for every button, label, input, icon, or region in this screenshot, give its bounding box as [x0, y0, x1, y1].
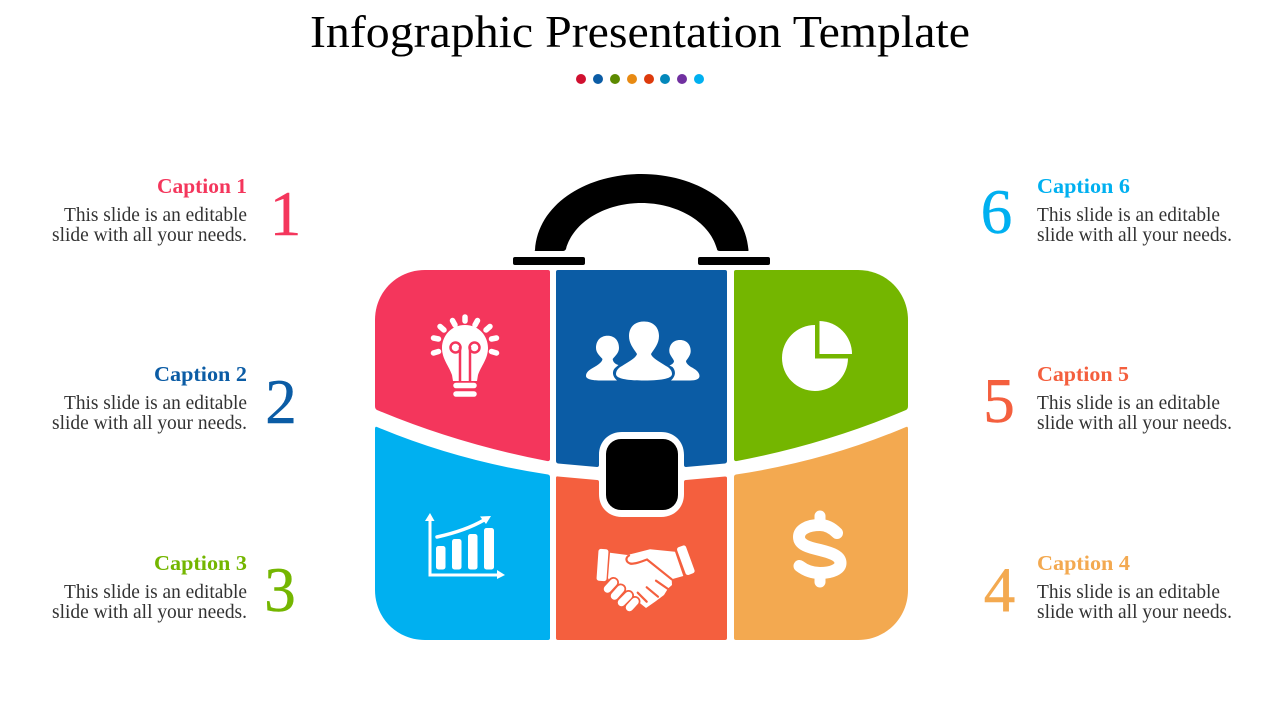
caption 1 block: Caption 1 — [157, 174, 247, 198]
decorative colored dots — [576, 74, 704, 84]
icon: dollar sign — [799, 516, 840, 582]
caption 4 block — [984, 551, 1232, 625]
caption 3 block: slide with all your needs. — [52, 601, 247, 623]
caption 1 block: This slide is an editable — [64, 204, 247, 226]
panel: blue top-middle — [556, 270, 727, 467]
caption 6 block: slide with all your needs. — [1037, 224, 1232, 246]
icon: growth bar chart — [425, 513, 505, 579]
caption 6 block — [981, 174, 1232, 247]
caption 5 block: Caption 5 — [1037, 362, 1129, 386]
caption 1 block — [52, 174, 301, 249]
caption 5 block: This slide is an editable — [1037, 392, 1220, 414]
caption 5 block: 5 — [983, 366, 1015, 436]
caption 4 block: 4 — [984, 555, 1015, 625]
caption 3 block: This slide is an editable — [64, 581, 247, 603]
caption 4 block: slide with all your needs. — [1037, 601, 1232, 623]
caption 2 block: 2 — [265, 367, 297, 437]
caption 5 block: slide with all your needs. — [1037, 412, 1232, 434]
caption 3 block: 3 — [264, 555, 296, 625]
caption 2 block: slide with all your needs. — [52, 412, 247, 434]
caption 6 block: Caption 6 — [1037, 174, 1130, 198]
caption 2 block: This slide is an editable — [64, 392, 247, 414]
caption 1 block: 1 — [270, 179, 301, 249]
caption 6 block: 6 — [981, 177, 1012, 247]
caption 4 block: This slide is an editable — [1037, 581, 1220, 603]
panel: green top-right — [734, 270, 908, 461]
panel: red bottom-middle — [556, 476, 727, 640]
caption 2 block: Caption 2 — [154, 362, 247, 386]
panel: orange bottom-right — [734, 427, 908, 640]
icon: pie chart — [782, 321, 852, 391]
icon: light bulb — [434, 317, 496, 394]
caption 5 block — [983, 362, 1232, 436]
caption 3 block: Caption 3 — [154, 551, 247, 575]
icon: people — [586, 322, 700, 380]
briefcase clasp — [606, 439, 678, 510]
title: Infographic Presentation Template — [310, 6, 970, 57]
icon: handshake — [596, 545, 695, 608]
caption 6 block: This slide is an editable — [1037, 204, 1220, 226]
caption 4 block: Caption 4 — [1037, 551, 1131, 575]
caption 2 block — [52, 362, 297, 437]
caption 1 block: slide with all your needs. — [52, 224, 247, 246]
caption 3 block — [52, 551, 296, 625]
panel: cyan bottom-left — [375, 427, 550, 640]
briefcase handle — [513, 174, 770, 265]
panel: pink top-left — [375, 270, 550, 461]
